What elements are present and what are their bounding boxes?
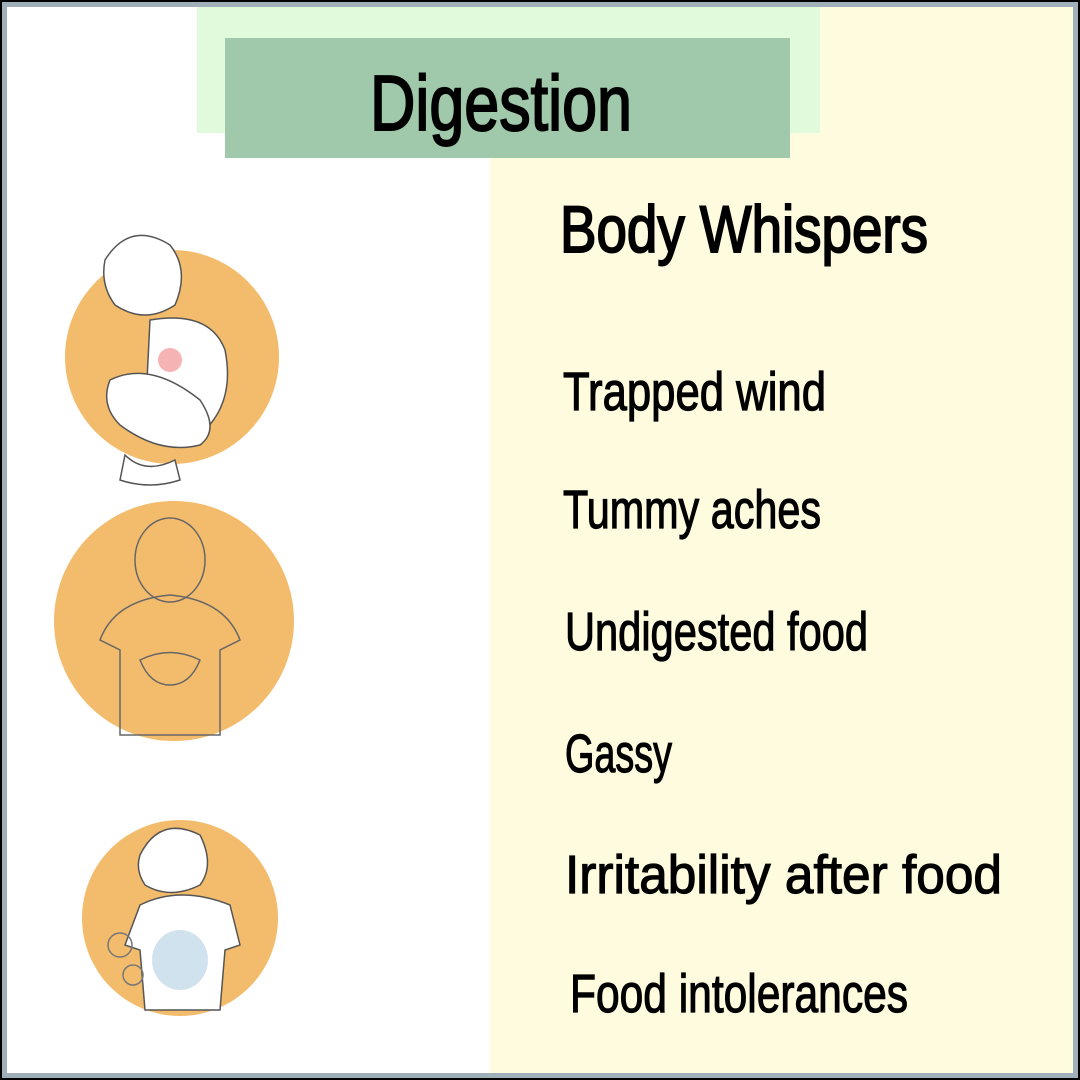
heading: Body Whispers: Body Whispers xyxy=(560,192,928,266)
icon: child with gas bubbles xyxy=(82,820,278,1016)
list of symptoms: Gassy xyxy=(565,724,672,784)
icon: child holding stomach xyxy=(54,501,294,741)
title: Digestion xyxy=(370,59,632,147)
list of symptoms: Undigested food xyxy=(565,602,868,662)
icon: child curled with tummy ache xyxy=(65,235,279,485)
panel: right cream xyxy=(490,7,1073,1073)
list of symptoms: Irritability after food xyxy=(565,845,1002,905)
list of symptoms xyxy=(563,362,1002,1024)
title banner xyxy=(197,7,820,158)
list of symptoms: Trapped wind xyxy=(563,362,826,422)
list of symptoms: Food intolerances xyxy=(570,964,908,1024)
list of symptoms: Tummy aches xyxy=(563,480,821,540)
